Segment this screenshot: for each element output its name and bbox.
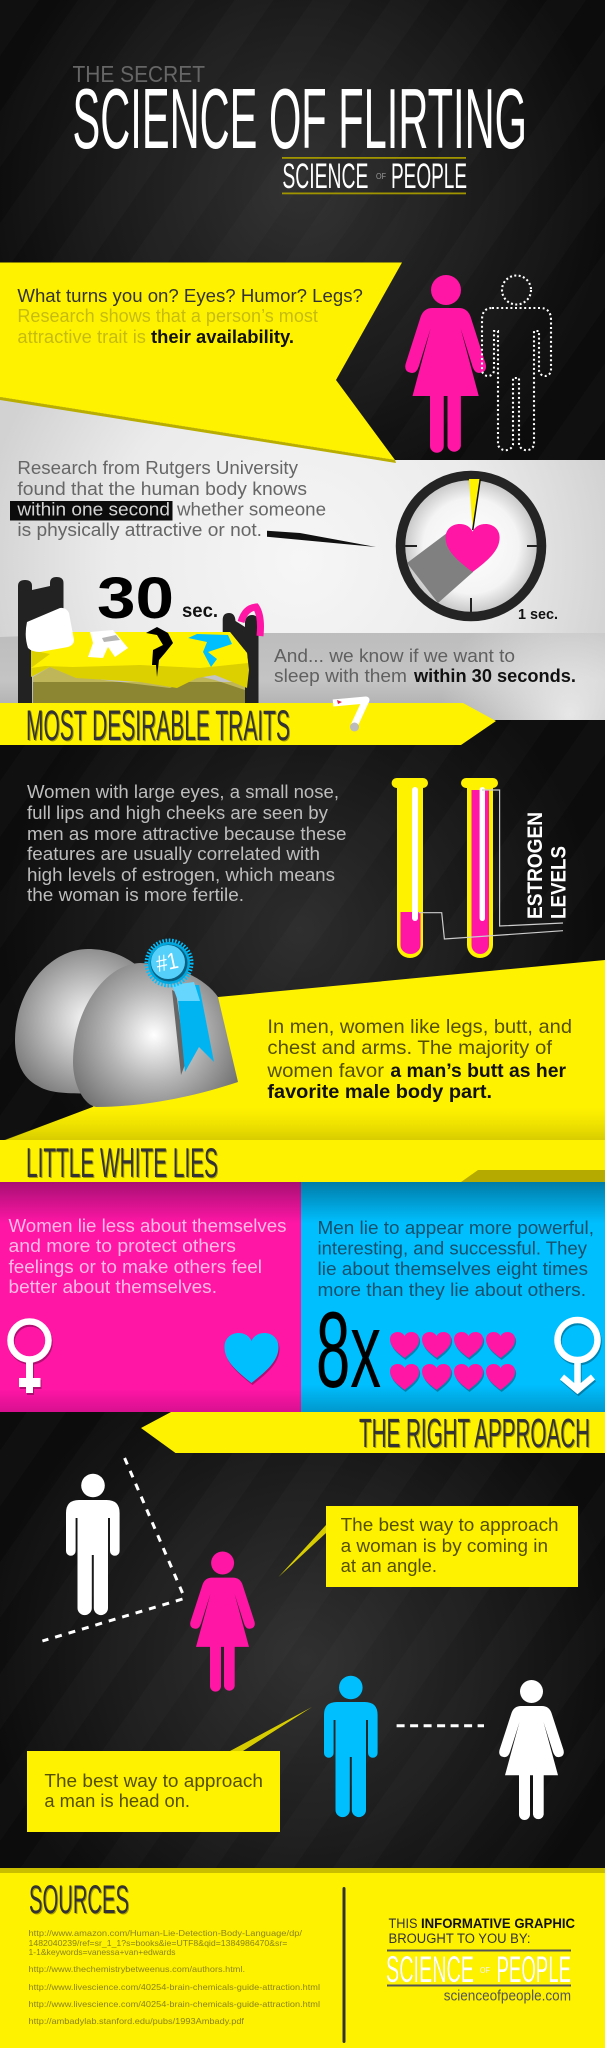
text: availability [17, 286, 363, 347]
text: women lie: better about themselves. [8, 1277, 217, 1297]
source list: http://ambadylab.stanford.edu/pubs/1993Ambady.pdf [28, 2016, 245, 2026]
callout: approach a woman: at an angle. [341, 1556, 437, 1576]
source list: http://www.livescience.com/40254-brain-chemicals-guide-attraction.html [28, 1999, 320, 2009]
text: men lie: Men lie to appear more powerful, [318, 1218, 594, 1238]
chart: estrogen test tubes [392, 778, 570, 958]
icon: blue heart [224, 1333, 278, 1383]
left lobe [15, 949, 140, 1093]
callout: approach a woman: a woman is by coming in [341, 1536, 548, 1556]
text: estrogen paragraph: the woman is more fertile. [27, 885, 244, 905]
text: within 30 seconds: And... we know if we want to [274, 646, 515, 666]
blue underwear [188, 634, 232, 667]
text: men lie: interesting, and successful. They [318, 1239, 587, 1259]
source list: 1-1&keywords=vanessa+van+edwards [28, 1947, 176, 1957]
source list [28, 1928, 320, 2026]
estrogen levels label [524, 812, 570, 919]
divider [342, 1887, 346, 2043]
panel: footer [0, 1868, 605, 2048]
footer logo: OF [480, 1966, 490, 1975]
logo: science of people: OF [376, 172, 386, 181]
panel: gray research section [0, 397, 605, 720]
callout: approach a woman: The best way to approach [341, 1515, 559, 1535]
text: rutgers research: whether someone [176, 500, 326, 520]
text: women lie: Women lie less about themselves [8, 1216, 286, 1236]
text: availability: attractive trait is [17, 327, 146, 347]
text: rutgers research: found that the human body knows [17, 479, 307, 499]
credit [388, 1916, 575, 1946]
text: estrogen paragraph [27, 782, 346, 905]
text: favorite male body part: favorite male body part. [267, 1081, 492, 1103]
blanket [31, 632, 249, 688]
text: men lie: more than they lie about others. [318, 1280, 586, 1300]
callout: approach a man: a man is head on. [44, 1791, 190, 1811]
heading band: most desirable traits: MOST DESIRABLE TRAITS [26, 702, 290, 750]
text: estrogen paragraph: features are usually correlated with [27, 844, 320, 864]
text: estrogen paragraph: high levels of estrogen, which means [27, 865, 335, 885]
text: favorite male body part: women favor [266, 1060, 385, 1082]
text: women lie: and more to protect others [8, 1236, 236, 1256]
heart shadow [407, 533, 473, 603]
text: women lie: feelings or to make others feel [8, 1257, 262, 1277]
callout: approach a man [27, 1707, 312, 1832]
leader lines [419, 790, 563, 939]
icon: venus symbol [10, 1322, 48, 1393]
bright blanket top [31, 632, 248, 668]
icon: white woman [499, 1680, 564, 1820]
pointer to clock [267, 531, 376, 547]
text: rutgers research [10, 458, 326, 540]
credit: BROUGHT TO YOU BY: [388, 1931, 530, 1946]
icon: mars symbol [558, 1320, 598, 1390]
text: within 30 seconds: sleep with them [274, 666, 407, 686]
ribbon [172, 990, 186, 1075]
text: estrogen paragraph: men as more attractive because these [27, 824, 346, 844]
text: men lie: lie about themselves eight times [318, 1259, 588, 1279]
label: 30 sec: sec. [182, 601, 218, 622]
footer logo: SCIENCE [386, 1949, 474, 1990]
callout: approach a man: The best way to approach [44, 1771, 263, 1791]
panel: yellow availability arrow [0, 262, 402, 463]
icon: pink woman holding hands [405, 275, 486, 453]
white shirt [88, 630, 128, 658]
label: 8x: 8x [316, 1289, 381, 1410]
estrogen levels label: ESTROGEN [524, 812, 547, 919]
source list: 1482040239/ref=sr_1_1?s=books&ie=UTF8&qid=1384986470&sr= [28, 1938, 287, 1948]
heading: sources: SOURCES [29, 1878, 129, 1922]
label: 30 sec: 30 [97, 566, 174, 631]
text: estrogen paragraph: Women with large eyes, a small nose, [27, 782, 339, 802]
text: favorite male body part: a man’s butt as her [390, 1060, 566, 1082]
text: availability: their availability. [151, 327, 294, 347]
text: within 30 seconds: within 30 seconds. [413, 666, 576, 686]
black bra [146, 627, 173, 677]
icon: white man [66, 1474, 120, 1615]
heading band: little white lies: LITTLE WHITE LIES [26, 1139, 218, 1186]
rosette: #1 [154, 947, 181, 977]
estrogen levels label: LEVELS [548, 846, 570, 919]
yellow one-second wedge [469, 479, 480, 530]
text: rutgers research: Research from Rutgers University [17, 458, 298, 478]
text: rutgers research: is physically attractive or not. [17, 520, 262, 540]
icon: eight hearts [390, 1332, 515, 1390]
icon: dotted outline man [482, 276, 551, 450]
angle dashed lines [42, 1458, 183, 1641]
pillow [26, 608, 74, 652]
credit: INFORMATIVE GRAPHIC [421, 1916, 575, 1931]
tube low [392, 778, 428, 958]
icon: clock with heart [400, 476, 542, 616]
text: availability: What turns you on? Eyes? Humor? Legs? [17, 286, 363, 306]
credit: THIS [388, 1916, 418, 1931]
label: 30 sec [97, 566, 218, 631]
icon: cigarette [333, 700, 366, 732]
panel: yellow body part section [0, 960, 605, 1185]
text: rutgers research: within one second [16, 500, 170, 520]
tube high [461, 778, 498, 958]
bed frame [18, 577, 64, 703]
text: availability: Research shows that a person’s most [17, 306, 318, 326]
logo: science of people: PEOPLE [391, 157, 467, 196]
text: favorite male body part [266, 1016, 572, 1103]
source list: http://www.amazon.com/Human-Lie-Detection-Body-Language/dp/ [28, 1928, 303, 1938]
source list: http://www.livescience.com/40254-brain-chemicals-guide-attraction.html [28, 1982, 320, 1992]
heart [446, 524, 500, 572]
text: men lie [318, 1218, 594, 1300]
text: estrogen paragraph: full lips and high cheeks are seen by [27, 803, 328, 823]
text: favorite male body part: chest and arms. The majority of [267, 1037, 553, 1059]
text: favorite male body part: In men, women like legs, butt, and [267, 1016, 572, 1038]
footer url: scienceofpeople.com [444, 1988, 571, 2005]
icon: blue man [324, 1676, 378, 1817]
icon: pink woman [190, 1552, 255, 1692]
callout: approach a woman [278, 1506, 578, 1587]
panel: men lie blue [301, 1182, 605, 1412]
text: within 30 seconds [274, 646, 576, 686]
label: 1 sec: 1 sec. [518, 606, 558, 623]
right lobe [73, 963, 238, 1107]
text: women lie [8, 1216, 286, 1297]
pink bra [241, 607, 260, 636]
source list: http://www.thechemistrybetweenus.com/authors.html. [28, 1964, 245, 1974]
head-on dashed line [397, 1724, 484, 1727]
title: THE SECRET [72, 61, 205, 87]
icon: messy bed [18, 577, 260, 703]
heading band: the right approach [141, 1410, 605, 1456]
icon: butt with first place ribbon [15, 940, 238, 1107]
logo: science of people: SCIENCE [282, 157, 368, 196]
under bed [33, 682, 245, 703]
panel: women lie pink [0, 1182, 301, 1412]
rosette [146, 940, 192, 986]
